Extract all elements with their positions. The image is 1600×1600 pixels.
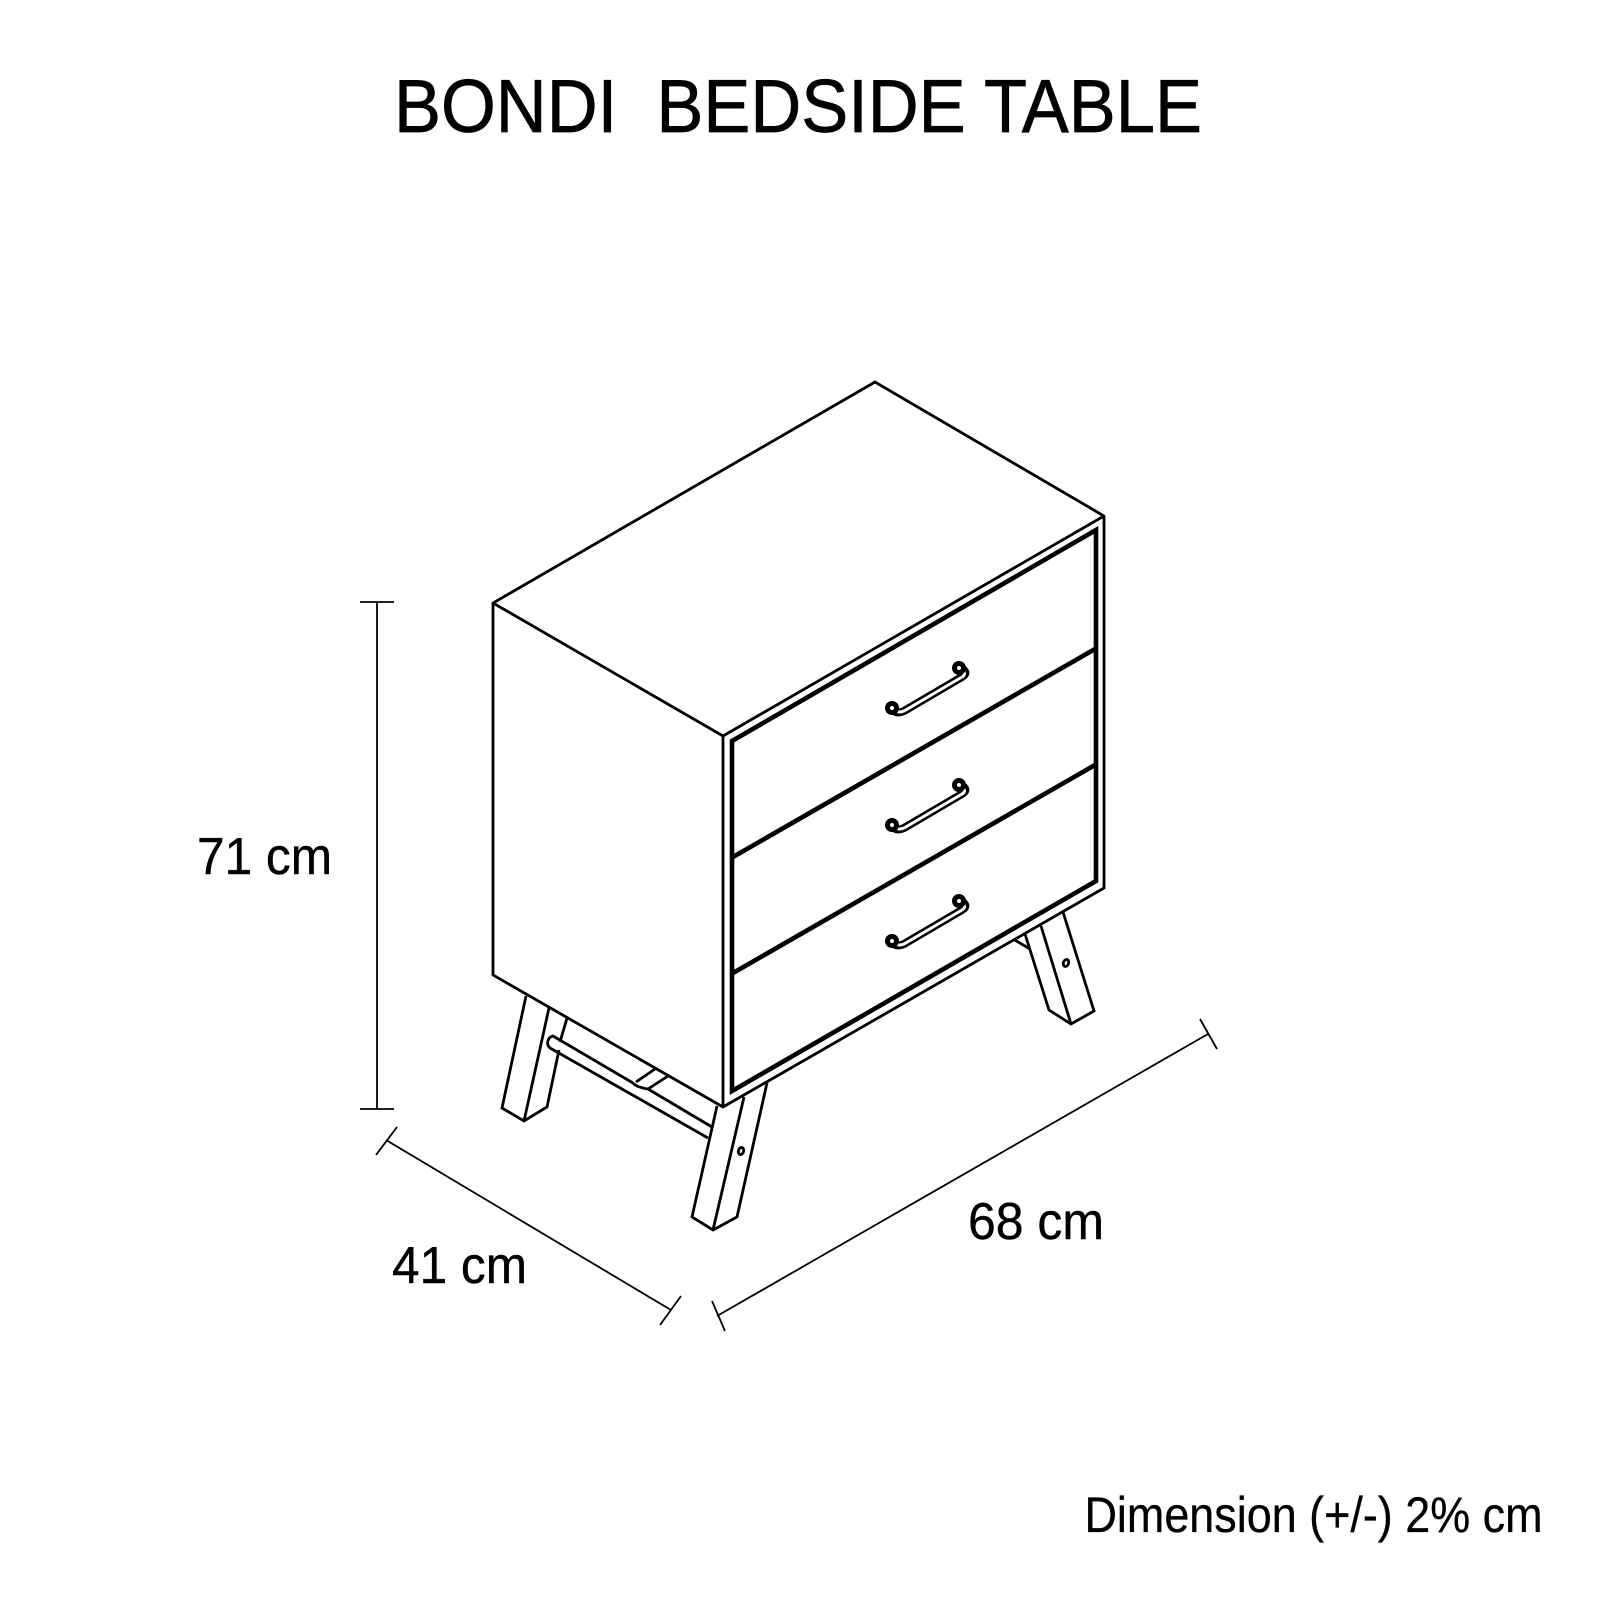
cabinet body	[493, 382, 1104, 1107]
front leg	[692, 1083, 767, 1230]
bedside table drawing	[493, 382, 1104, 1230]
depth dimension line	[376, 1127, 681, 1325]
handle: top drawer	[888, 664, 965, 712]
handle: middle drawer	[888, 780, 965, 830]
drawer dividers	[733, 649, 1095, 973]
width dimension line	[712, 1019, 1217, 1331]
tolerance note: Dimension (+/-) 2% cm	[1084, 1487, 1542, 1543]
back left leg	[502, 996, 567, 1121]
width label: 68 cm	[968, 1193, 1104, 1251]
drawer frame	[732, 530, 1096, 1091]
depth label: 41 cm	[392, 1237, 527, 1295]
height dimension line	[360, 602, 394, 1109]
handle: bottom drawer	[888, 896, 965, 946]
stretcher bar	[548, 1036, 712, 1138]
title: BONDI BEDSIDE TABLE	[394, 64, 1202, 148]
height label: 71 cm	[197, 828, 332, 886]
back right leg	[1013, 912, 1094, 1024]
